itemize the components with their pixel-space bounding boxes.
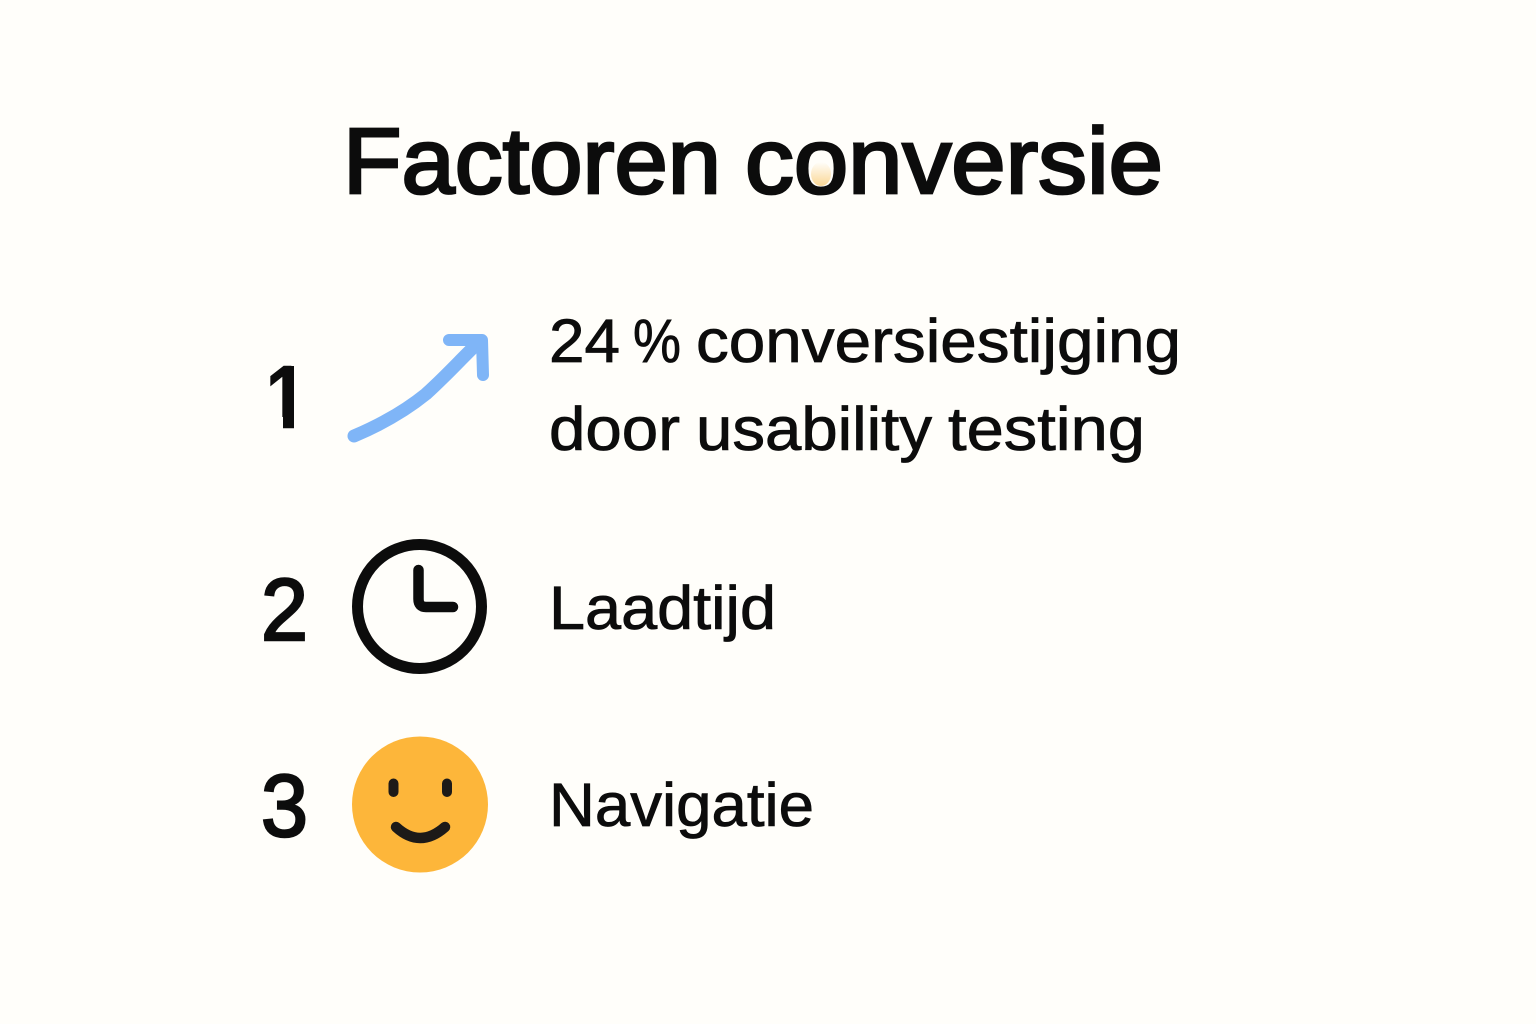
number 3: 3 (261, 756, 308, 855)
text: conversion increase: % (633, 307, 681, 375)
panel: factor 1 (258, 307, 1181, 463)
text: conversion increase: door (549, 395, 680, 463)
icon: smiley (352, 736, 488, 872)
number 2: 2 (261, 560, 308, 659)
text: conversion increase (549, 307, 1181, 463)
text: conversion increase: conversiestijging (696, 307, 1181, 375)
panel: factor 3 (261, 736, 814, 872)
title: conversie (745, 109, 1163, 213)
text: loading time: Laadtijd (549, 574, 776, 642)
text: navigation: Navigatie (549, 771, 814, 839)
number 1: 1 (264, 349, 307, 446)
text: conversion increase: usability (696, 395, 933, 463)
title: Factoren (343, 109, 721, 213)
title (343, 109, 1163, 213)
text: conversion increase: 24 (549, 307, 620, 375)
icon: rising arrow (354, 340, 483, 436)
text: conversion increase: testing (948, 395, 1145, 463)
panel: factor 2 (261, 544, 776, 668)
icon: clock (358, 544, 482, 668)
